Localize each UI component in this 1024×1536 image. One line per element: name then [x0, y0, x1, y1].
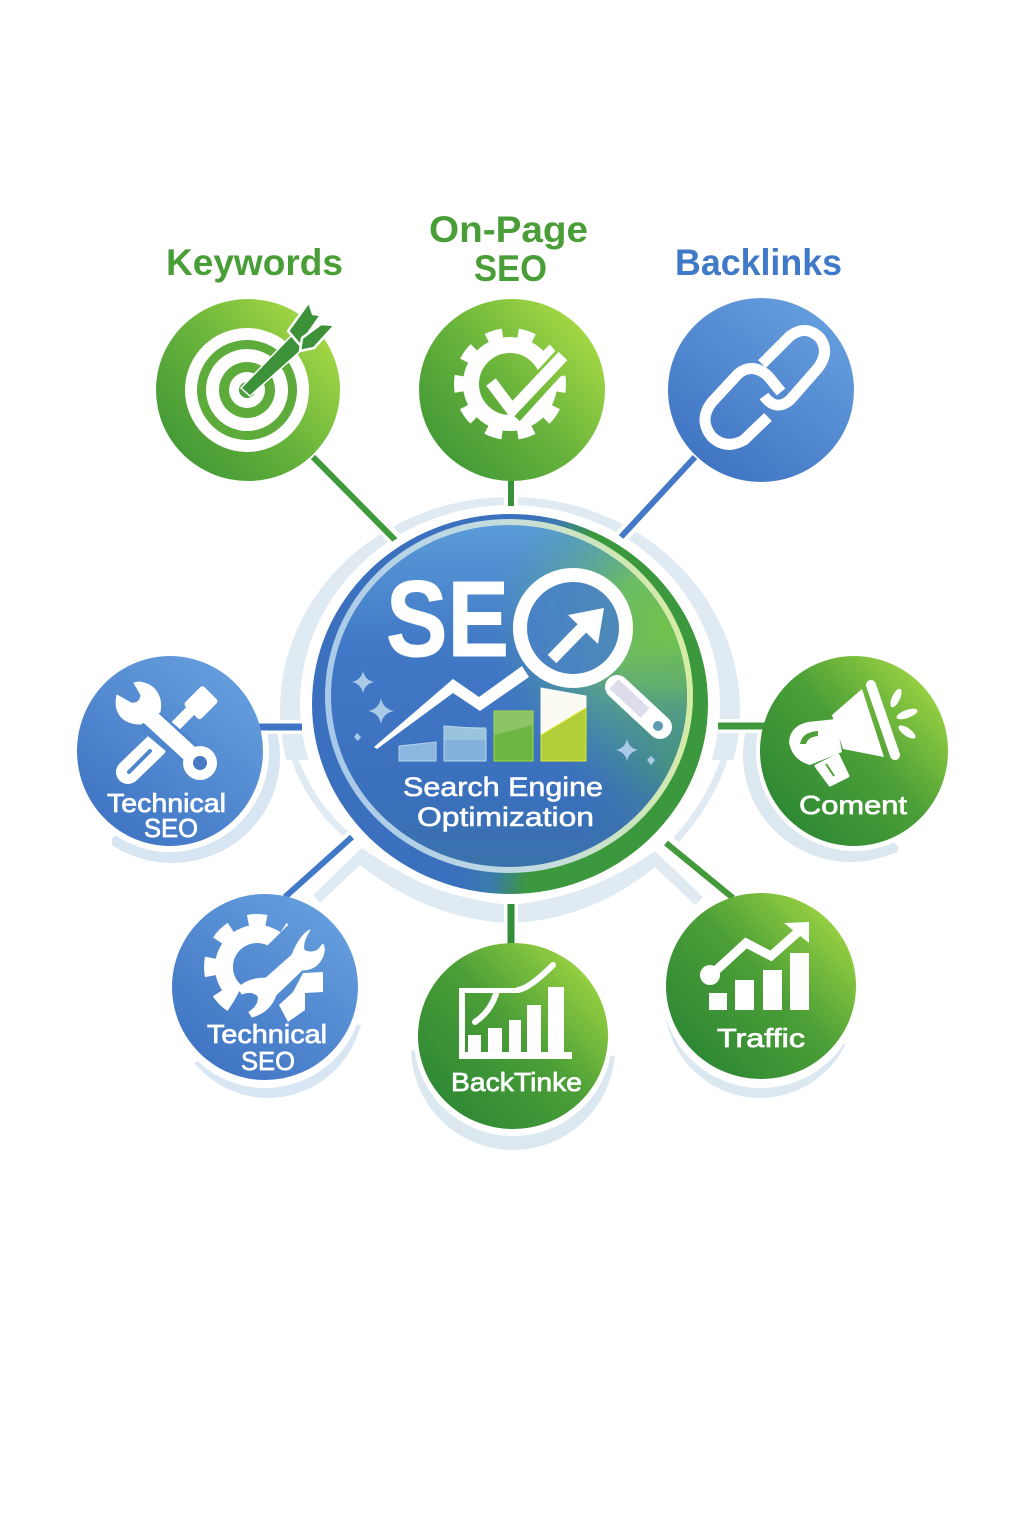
- label: BackTinke: [451, 1067, 582, 1097]
- node: Comment: [760, 656, 948, 846]
- label: Technical: [107, 788, 226, 818]
- label: Coment: [799, 790, 908, 820]
- icon: megaphone: [789, 685, 919, 785]
- badge caption: Search Engine: [403, 772, 603, 802]
- node halo crescents: [64, 648, 959, 1150]
- node: On-Page SEO: [419, 209, 605, 481]
- SE lettering: SE: [386, 558, 509, 679]
- label: SEO: [144, 813, 198, 843]
- node: Keywords: [156, 242, 343, 481]
- node: Backlinks: [668, 242, 854, 482]
- node: Technical SEO (gear): [172, 894, 358, 1080]
- icon: gear with check: [460, 334, 563, 434]
- label: SEO: [241, 1046, 295, 1076]
- node: Technical SEO (tools): [77, 656, 263, 846]
- central halo ring: [280, 497, 740, 923]
- connector lines: [258, 457, 766, 944]
- heading: On-Page SEO: On-Page: [429, 209, 588, 250]
- heading: Keywords: Keywords: [166, 242, 343, 283]
- node: Traffic: [666, 893, 856, 1079]
- sparkles: [352, 671, 655, 765]
- icon: target with dart: [185, 302, 335, 452]
- bar chart: [399, 688, 586, 761]
- central SEO badge: [304, 506, 716, 902]
- magnifying glass with arrow: [520, 575, 663, 731]
- heading: On-Page SEO: [429, 209, 588, 289]
- icon: bars and arrow: [700, 922, 809, 1010]
- label: Traffic: [717, 1023, 805, 1053]
- icon: wrench and screwdriver: [116, 682, 219, 780]
- badge caption: [403, 772, 603, 832]
- label: Technical: [207, 1019, 327, 1049]
- badge caption: Optimization: [417, 802, 594, 832]
- node: BackTinke: [418, 943, 608, 1129]
- icon: chain links: [705, 330, 825, 444]
- icon: growth chart: [459, 965, 572, 1059]
- trend line: [374, 666, 529, 749]
- label: [107, 788, 226, 843]
- heading: On-Page SEO: SEO: [474, 248, 547, 289]
- label: [207, 1019, 327, 1076]
- infographic canvas: [77, 216, 948, 1150]
- heading: Backlinks: Backlinks: [675, 242, 842, 283]
- badge disc: [304, 506, 716, 902]
- icon: gear and wrench: [211, 921, 324, 1022]
